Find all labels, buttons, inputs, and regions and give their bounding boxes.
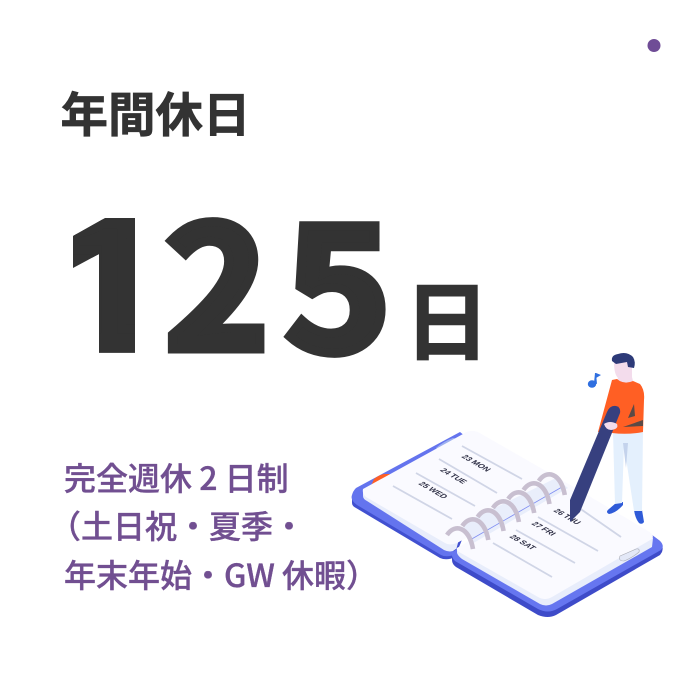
unit: days: 日 <box>404 255 490 378</box>
left cover <box>352 497 470 559</box>
hair <box>612 353 635 368</box>
right page <box>457 483 653 606</box>
description text: （土日祝・夏季・ <box>49 502 305 548</box>
illustration: open ring notebook <box>352 431 663 617</box>
sweater shadow <box>623 404 643 427</box>
date labels: 23 MON <box>459 453 493 473</box>
left page <box>363 431 567 552</box>
right cover <box>452 486 663 617</box>
number 125: 2 <box>165 153 269 398</box>
light blue bookmark tab <box>436 438 458 450</box>
description text <box>49 454 378 597</box>
right shoe <box>634 510 644 524</box>
giant pencil <box>570 406 620 522</box>
description text: 年末年始・GW 休暇） <box>64 551 378 597</box>
heading: annual holidays: 年間休日 <box>60 77 250 146</box>
ruled lines <box>493 503 621 577</box>
date labels: 28 SAT <box>507 533 538 551</box>
ruled lines <box>393 446 522 519</box>
date labels: 24 TUE <box>438 467 470 485</box>
hand <box>604 422 617 430</box>
neck and face <box>614 362 633 384</box>
date labels: 27 FRI <box>529 520 558 537</box>
illustration: person holding pencil <box>570 353 644 524</box>
page clip <box>620 549 639 561</box>
description text: 完全週休 2 日制 <box>64 454 289 500</box>
left shoe <box>607 502 623 514</box>
date labels <box>416 453 493 500</box>
trousers <box>613 430 643 511</box>
music note <box>588 373 601 388</box>
date labels: 26 THU <box>551 507 583 526</box>
number 125 <box>73 217 386 358</box>
orange sweater <box>598 379 644 434</box>
orange bookmark tab <box>371 474 390 486</box>
date labels: 25 WED <box>416 480 450 500</box>
binder rings <box>447 474 565 549</box>
date labels <box>507 507 583 551</box>
big number: 125 days <box>73 217 478 360</box>
spine gutter <box>462 478 568 545</box>
number 125: 5 <box>285 156 391 400</box>
decorative purple dot <box>648 39 660 52</box>
number 125: 1 <box>56 153 156 398</box>
